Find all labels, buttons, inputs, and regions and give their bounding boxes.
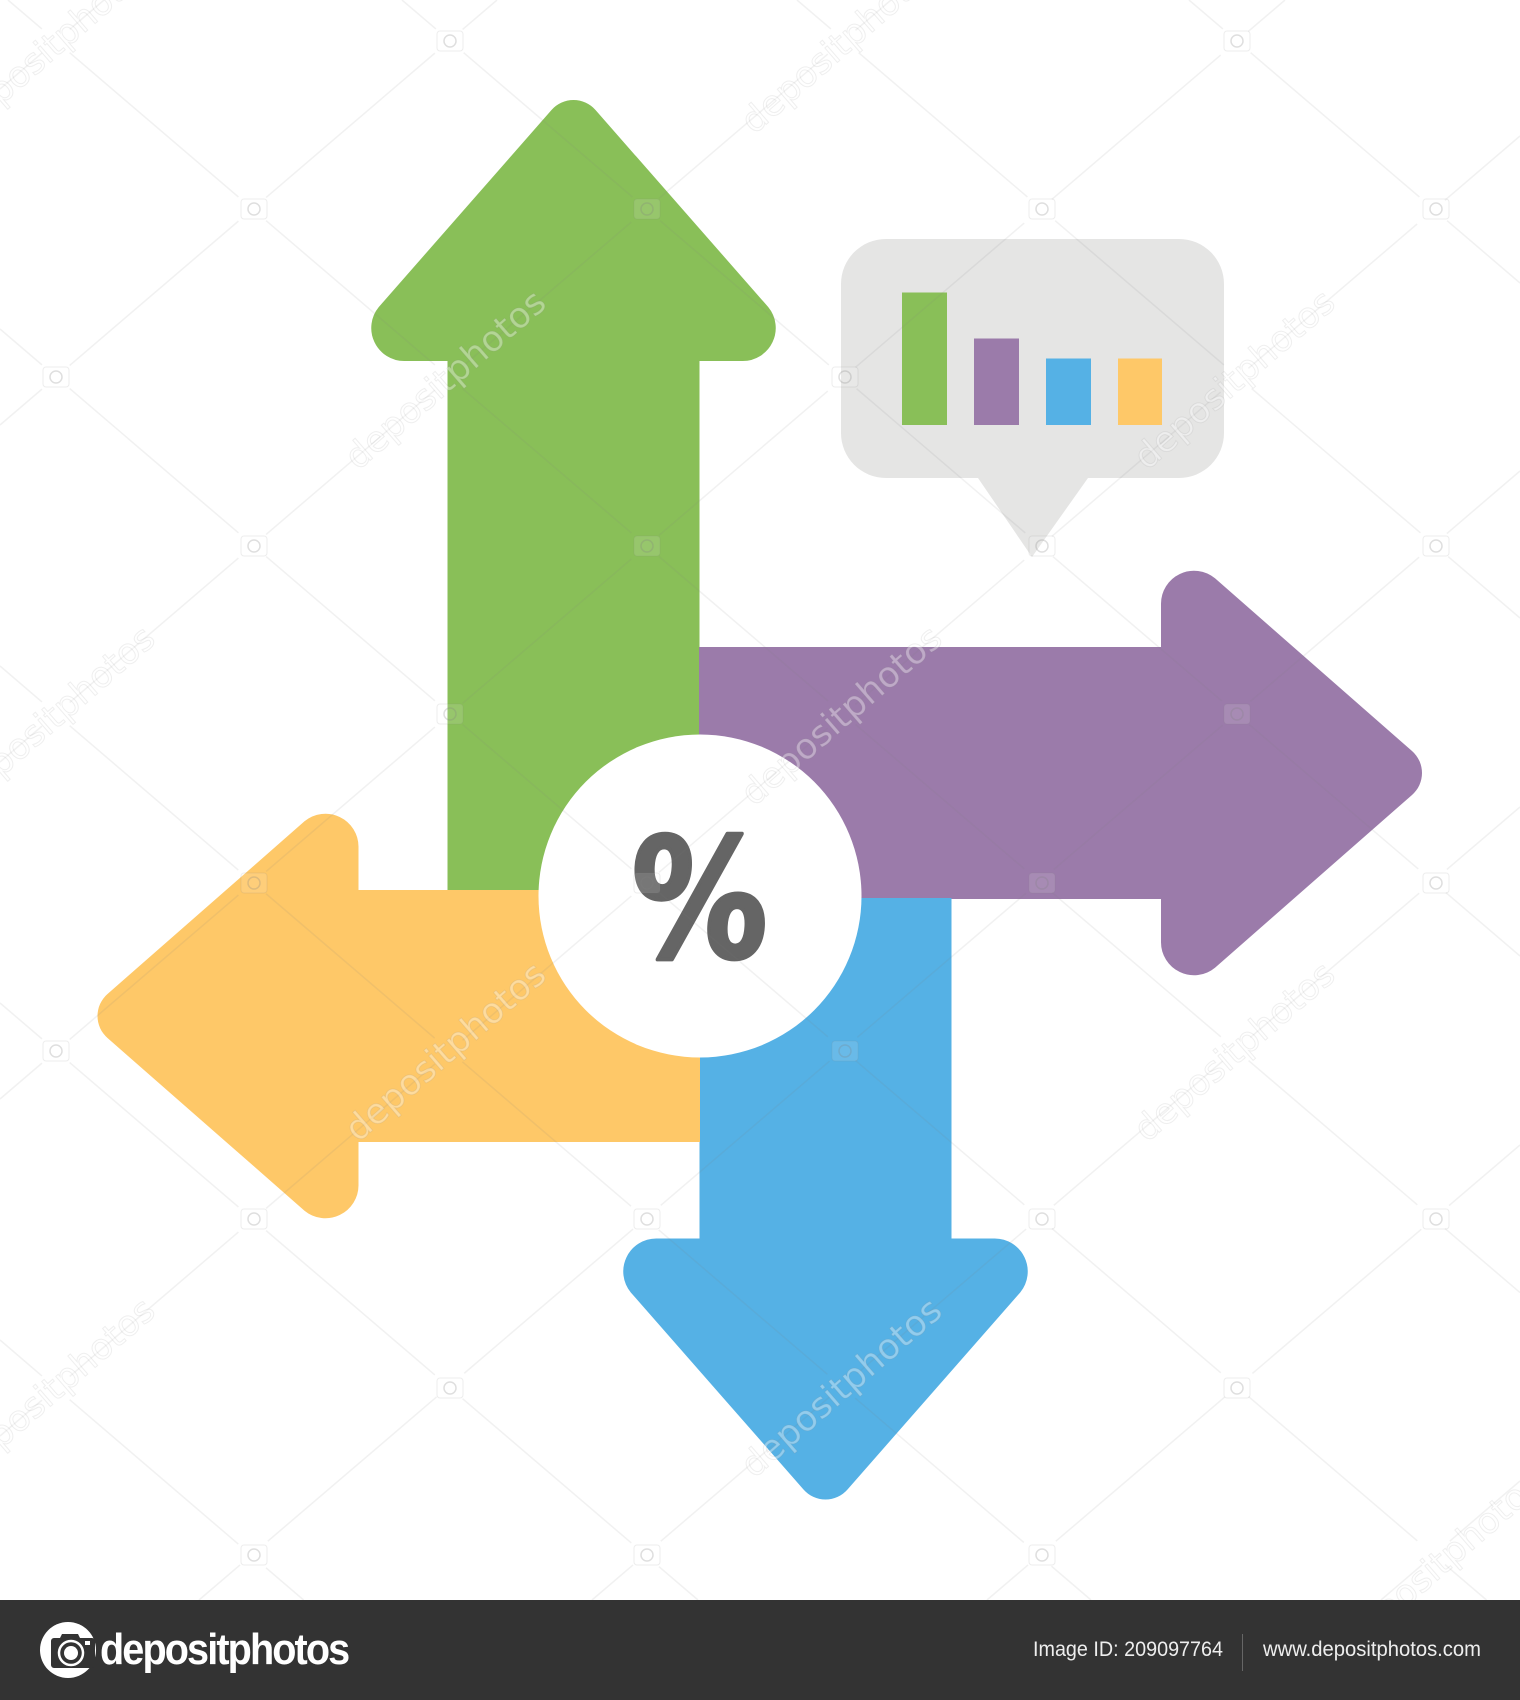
icon: camera logo <box>40 1622 96 1678</box>
arrow: purple pointing right <box>699 571 1422 975</box>
watermark pattern: depositphotos <box>1127 954 1343 1150</box>
bar: green <box>902 292 947 425</box>
center circle with percent sign <box>538 734 862 1058</box>
bar: yellow <box>1118 358 1162 425</box>
watermark pattern: depositphotos <box>338 282 554 478</box>
arrow: blue pointing down <box>623 898 1028 1500</box>
arrow: yellow pointing left <box>98 814 700 1218</box>
bar: purple <box>974 338 1019 425</box>
watermark pattern: depositphotos <box>734 1290 950 1486</box>
watermark pattern: depositphotos <box>734 618 950 814</box>
image id: Image ID: 209097764 <box>1033 1638 1223 1661</box>
logo wordmark: depositphotos <box>100 1624 350 1673</box>
arrow: green pointing up <box>371 100 776 890</box>
bar: blue <box>1046 358 1091 425</box>
watermark pattern: depositphotos <box>338 954 554 1150</box>
footer bar <box>0 1600 1520 1700</box>
speech bubble with bar chart <box>841 239 1224 557</box>
watermark pattern: depositphotos <box>1127 282 1343 478</box>
percent symbol: % <box>625 804 774 997</box>
website url: www.depositphotos.com <box>1262 1638 1481 1661</box>
